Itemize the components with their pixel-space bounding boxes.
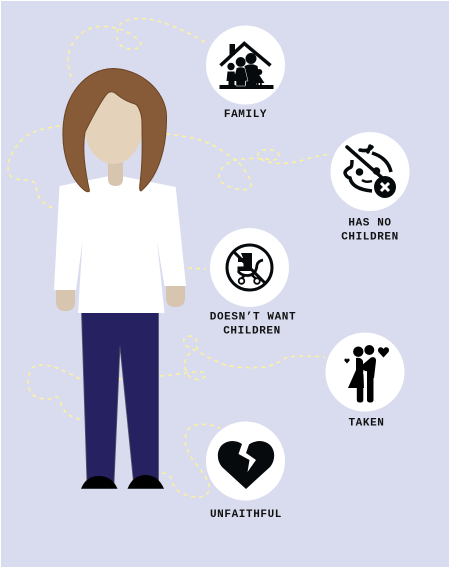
label: doesn't want children xyxy=(210,312,296,338)
label: has no children: CHILDREN xyxy=(341,232,399,244)
right hand xyxy=(166,284,185,307)
label: taken: TAKEN xyxy=(348,418,385,430)
circle: taken xyxy=(326,332,404,412)
label: doesn't want children: DOESN’T WANT xyxy=(210,312,296,324)
left hand xyxy=(56,288,75,311)
circle: doesn't want children xyxy=(210,228,289,307)
icon: couple with hearts xyxy=(344,345,389,402)
label: family: FAMILY xyxy=(224,109,267,121)
figure: woman xyxy=(54,68,186,489)
white shirt xyxy=(54,176,186,313)
trousers xyxy=(82,312,158,483)
left shoe xyxy=(81,476,118,489)
item: has no children xyxy=(330,132,410,244)
item: unfaithful xyxy=(206,422,285,521)
item: family xyxy=(206,26,285,121)
neck xyxy=(108,158,123,186)
right shoe xyxy=(128,475,164,489)
icon: house with family xyxy=(220,44,274,89)
item: taken xyxy=(326,332,404,430)
neck over collar xyxy=(108,170,123,186)
face xyxy=(84,90,142,164)
label: doesn't want children: CHILDREN xyxy=(223,326,281,338)
circle: unfaithful xyxy=(206,422,285,500)
circle: family xyxy=(206,26,285,104)
label: has no children: HAS NO xyxy=(348,218,392,230)
icon: baby crossed out xyxy=(345,146,396,198)
icon: crossed-out stroller xyxy=(227,245,272,290)
hair xyxy=(63,68,167,192)
label: has no children xyxy=(341,218,399,244)
icon: broken heart xyxy=(218,441,274,489)
label: unfaithful: UNFAITHFUL xyxy=(210,509,282,521)
item: doesn't want children xyxy=(210,228,296,338)
circle: has no children xyxy=(330,132,410,211)
